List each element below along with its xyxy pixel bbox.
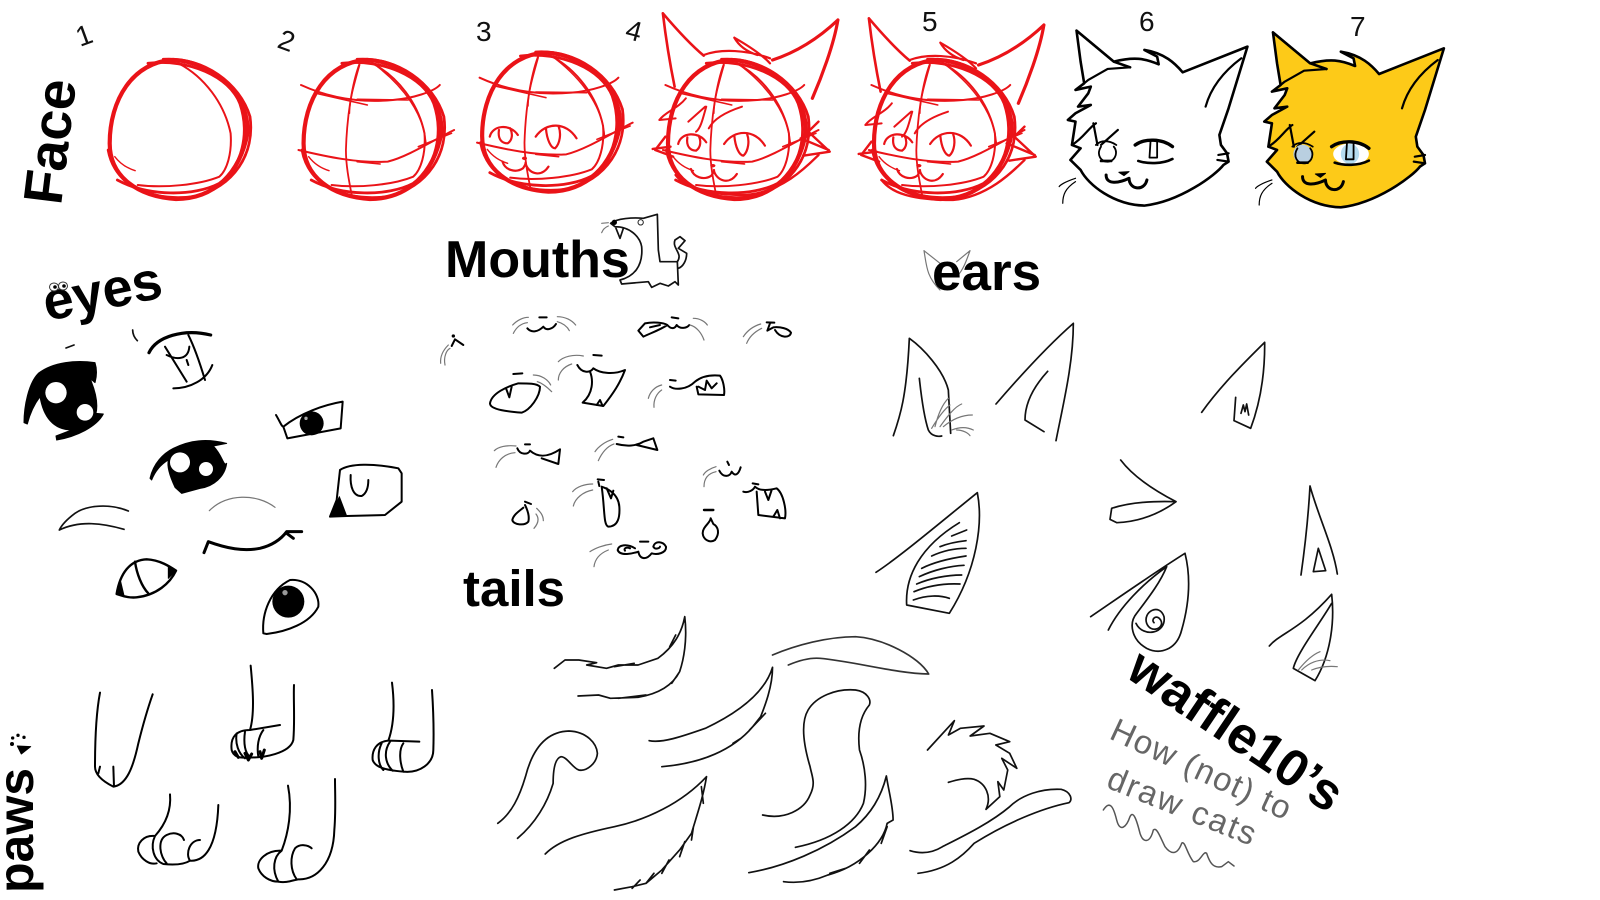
step numbers: 3 (476, 16, 492, 47)
ear examples (876, 323, 1337, 681)
step 7: coloured cat face (1256, 32, 1444, 207)
mouths section (441, 214, 791, 567)
heading: Face: Face (11, 75, 88, 207)
step 6: inked cat face (1059, 31, 1247, 206)
step numbers: 2 (274, 24, 299, 58)
icon: dog with open mouth (602, 214, 687, 287)
ear 2: tall (996, 323, 1073, 441)
title: waffle10's: waffle10’s (1116, 637, 1354, 824)
paw examples (95, 666, 434, 882)
step numbers: 1 (71, 18, 97, 53)
step 3: eyes, nose and mouth added (477, 52, 633, 192)
step 1: head circle (108, 59, 251, 199)
tail 1: scruffy (554, 617, 686, 698)
ear 3: small notched (1202, 342, 1265, 428)
ear 4: striped (876, 493, 979, 613)
tail 7: long pointed (749, 776, 893, 882)
subtitle: How (not) to draw cats: draw cats (1102, 759, 1262, 852)
tail 8: fluffy (927, 721, 1017, 809)
step numbers: 5 (922, 6, 938, 37)
step numbers: 7 (1350, 11, 1366, 42)
heading: eyes with small eye icon: eyes (37, 250, 167, 333)
step numbers: 6 (1139, 6, 1155, 37)
ear 1: furry (893, 338, 973, 436)
tail examples (498, 617, 1071, 890)
paw 1: front view (95, 693, 153, 787)
subtitle: How (not) to draw cats: How (not) to (1105, 711, 1297, 827)
mouth set (441, 317, 791, 567)
eyes of the coloured cat (1292, 142, 1369, 165)
eye: narrow slanted (149, 333, 212, 388)
heading: ears: ears (932, 243, 1041, 302)
eye: blocky profile (330, 465, 402, 517)
step numbers (71, 6, 1366, 58)
step numbers: 4 (622, 14, 646, 48)
eye: round realistic (263, 580, 318, 634)
tail 3: pointed (649, 667, 773, 767)
icon: paw print (10, 734, 31, 754)
ear 6: narrow (1301, 486, 1337, 575)
tail 6: jagged sweep (545, 777, 707, 890)
paw 3: side toes (373, 683, 434, 772)
tail 9: slim raised (910, 789, 1071, 873)
step 2: head circle with guide lines (298, 59, 454, 199)
heading: tails: tails (463, 560, 565, 617)
eye: wink (204, 532, 302, 553)
heading: Mouths: Mouths (445, 231, 630, 289)
icon: small ears behind heading (924, 251, 970, 290)
paw 2: with claws (231, 666, 294, 760)
ear 8: tufted (1269, 594, 1337, 681)
eye: side glance (276, 402, 343, 438)
tail 2: long flat (773, 637, 929, 674)
paw 4: wide toes (138, 794, 218, 865)
ear 5: sideways (1110, 460, 1176, 523)
tail 4: curled (498, 731, 597, 838)
ear 7: spiral (1091, 553, 1189, 651)
tail 5: S-curve (763, 690, 870, 847)
eye: closed brow lines (59, 497, 275, 530)
eye: large shiny anime (24, 330, 137, 440)
eye: small shiny anime (150, 441, 227, 493)
step 4: ears and hair added (653, 13, 838, 199)
step 5: full red sketch (859, 18, 1044, 200)
eye examples (24, 330, 402, 634)
eye: cat slit (117, 559, 176, 598)
squiggle underline (1103, 805, 1234, 867)
paw 5: large toes (258, 779, 335, 882)
